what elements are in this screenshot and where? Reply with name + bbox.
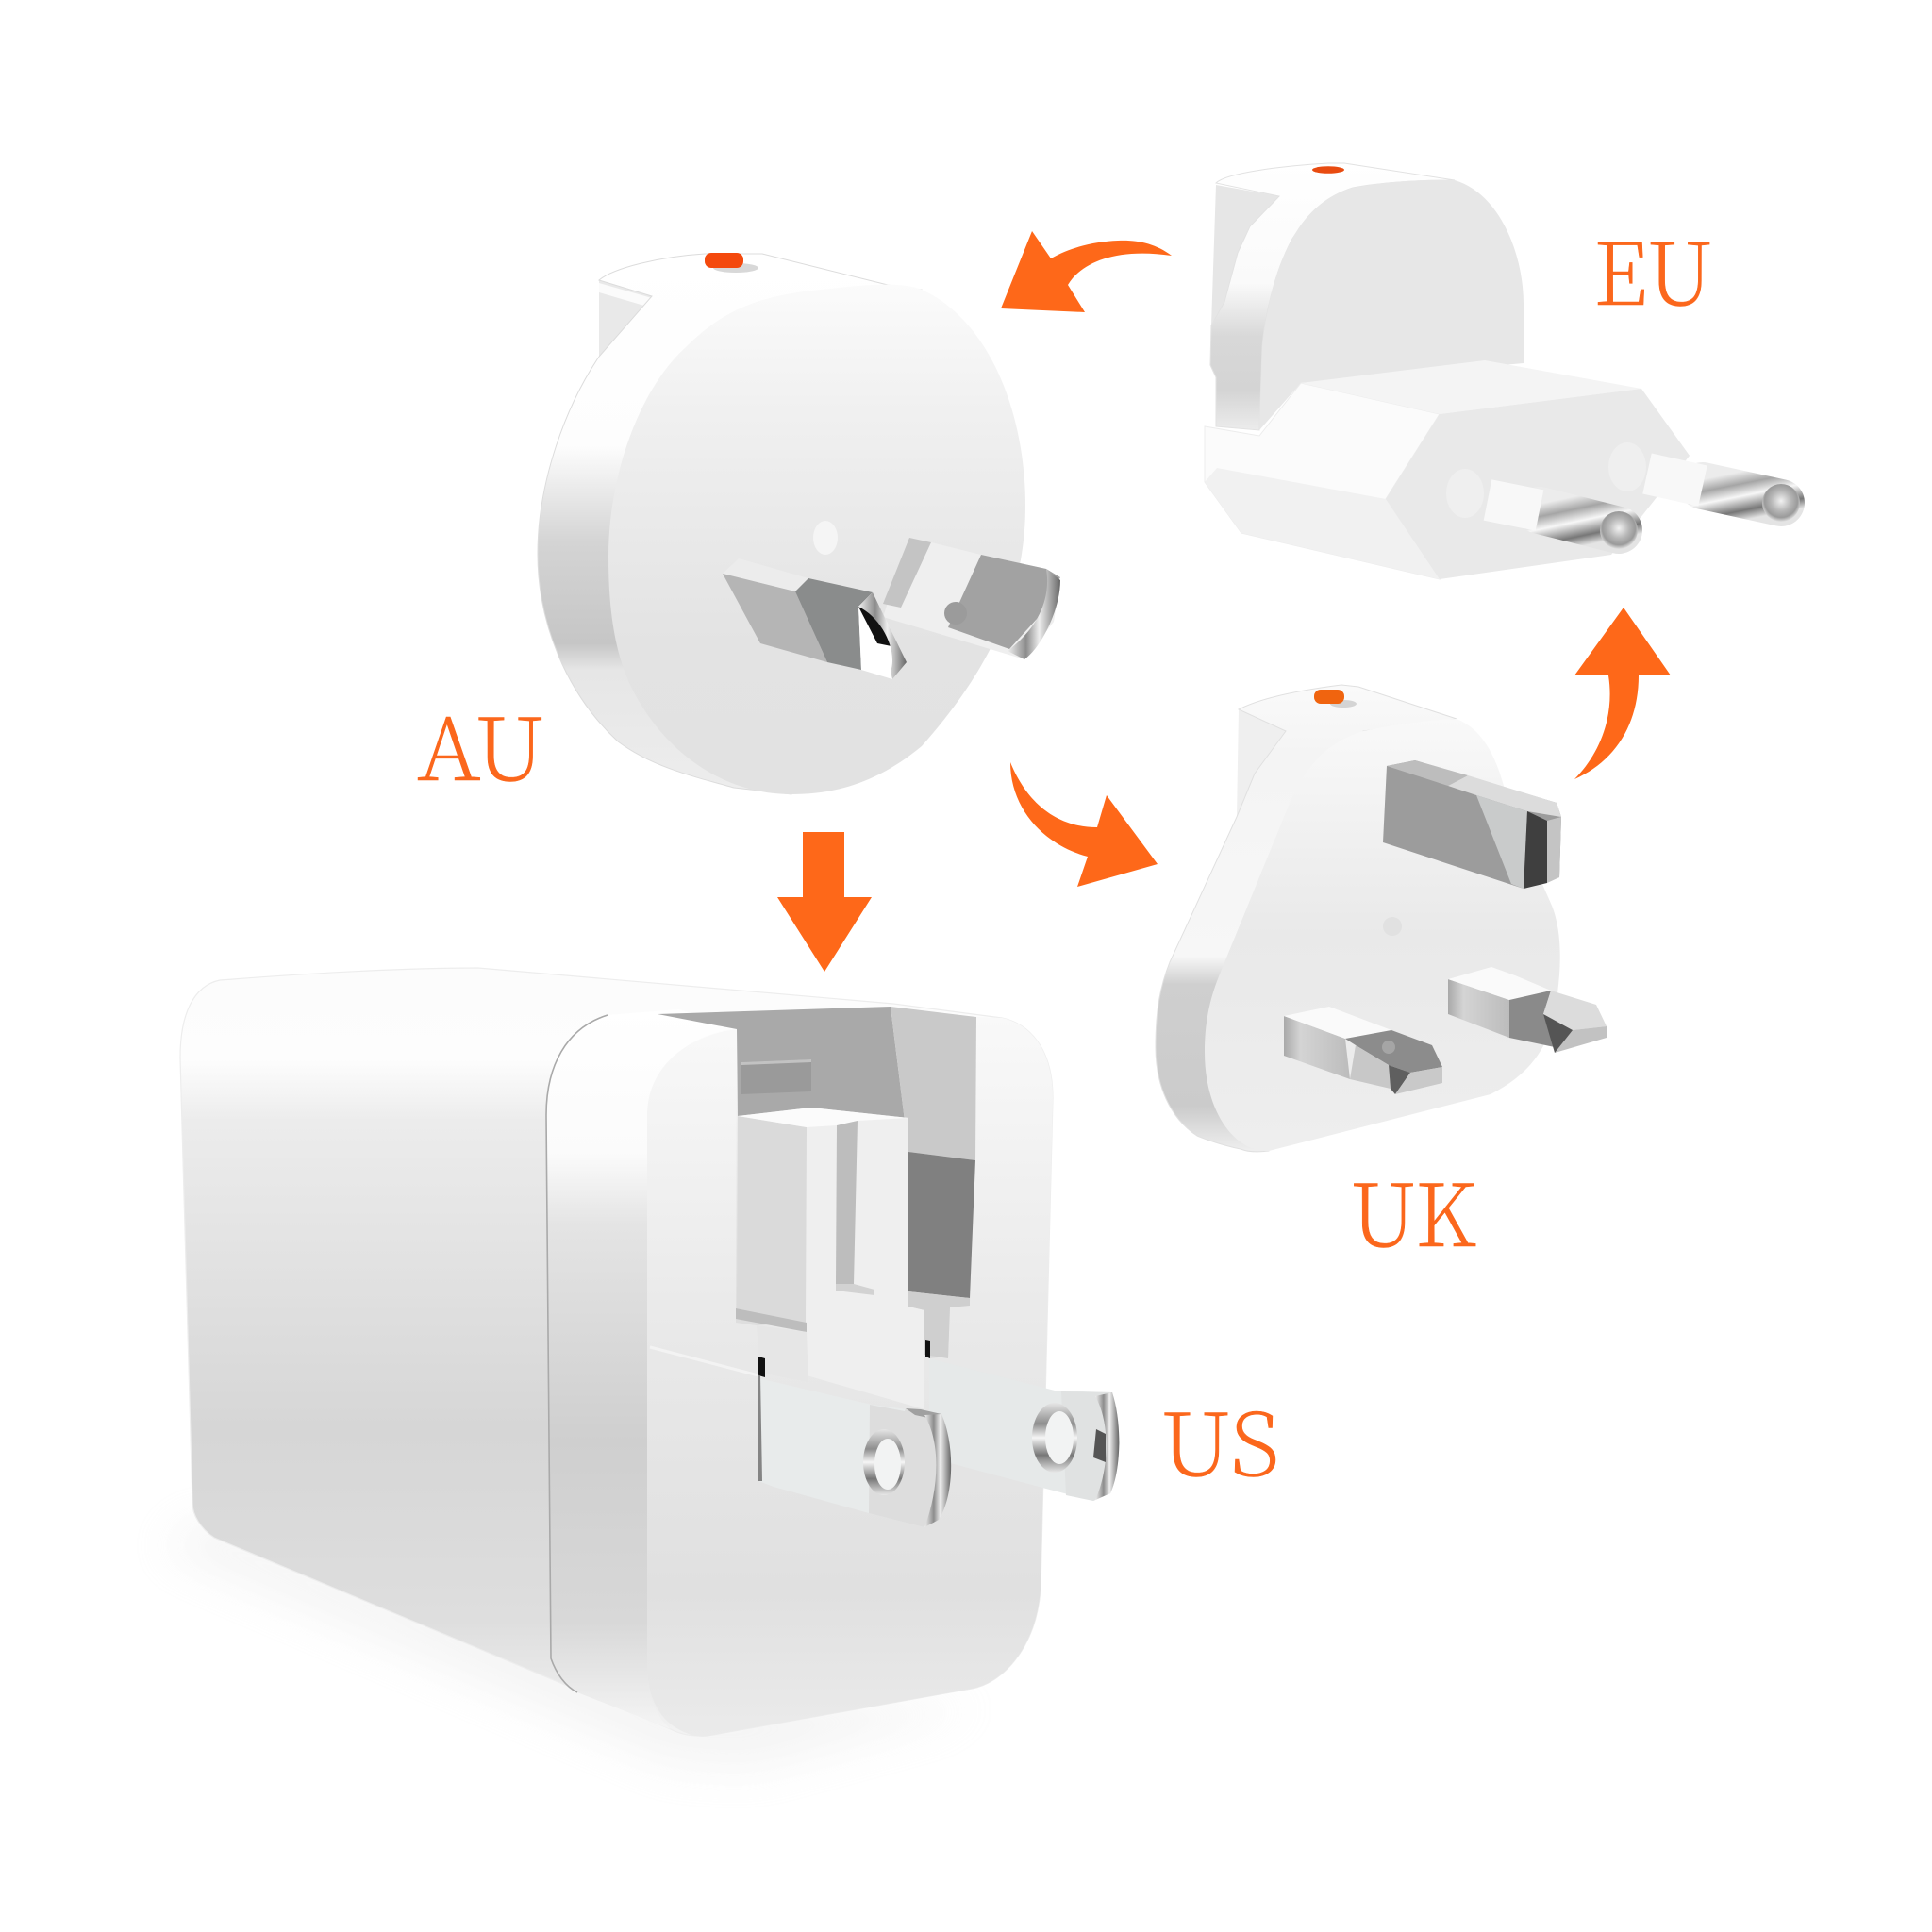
UK back plate [1237, 709, 1286, 817]
UK lower-right prong [1448, 967, 1607, 1053]
EU plug block side [1205, 383, 1440, 579]
label: US: US [1160, 1376, 1280, 1501]
illustration: AU adapter [538, 253, 1060, 794]
EU face [1259, 180, 1524, 430]
AU orange button [705, 253, 758, 273]
UK face [1205, 719, 1560, 1151]
illustration: UK adapter [1156, 685, 1607, 1152]
EU plug block top [1301, 360, 1641, 414]
AU back panel [599, 280, 652, 357]
UK centre dimple [1383, 917, 1402, 936]
AU right prong [883, 538, 1060, 659]
arrow: AU to UK [1010, 762, 1158, 887]
AU centre dimple [813, 521, 838, 555]
arrow: EU to AU [1001, 231, 1172, 312]
UK orange button [1314, 690, 1357, 708]
AU circular face [608, 285, 1025, 794]
AU top and rim [538, 254, 922, 794]
illustration: US charger body [160, 968, 1120, 1769]
arrow: UK to EU [1574, 608, 1671, 779]
shadow under charger [160, 1519, 981, 1769]
illustration: EU adapter [1205, 163, 1800, 579]
UK top prong [1383, 760, 1561, 889]
right blade hole [1032, 1403, 1077, 1473]
EU back plate [1211, 185, 1279, 325]
label: UK: UK [1350, 1147, 1476, 1272]
EU rim [1210, 163, 1455, 430]
seam segment [546, 1009, 737, 1729]
EU plug hex face [1386, 389, 1690, 579]
charger silhouette [180, 968, 1053, 1736]
UK lower-left prong [1284, 1007, 1442, 1094]
folding plug base [736, 1108, 930, 1409]
charger front face [647, 1017, 1053, 1737]
EU left pin [1446, 469, 1638, 549]
UK rim [1156, 685, 1457, 1152]
label: EU: EU [1593, 206, 1713, 330]
left blade hole [863, 1429, 905, 1495]
label: AU: AU [417, 681, 545, 806]
EU orange button [1312, 166, 1344, 174]
AU left prong [723, 558, 907, 679]
EU right pin [1608, 442, 1800, 522]
left blade [758, 1378, 951, 1527]
arrow: AU to US [777, 832, 872, 972]
right blade [929, 1358, 1120, 1501]
recessed cavity [658, 1007, 976, 1358]
